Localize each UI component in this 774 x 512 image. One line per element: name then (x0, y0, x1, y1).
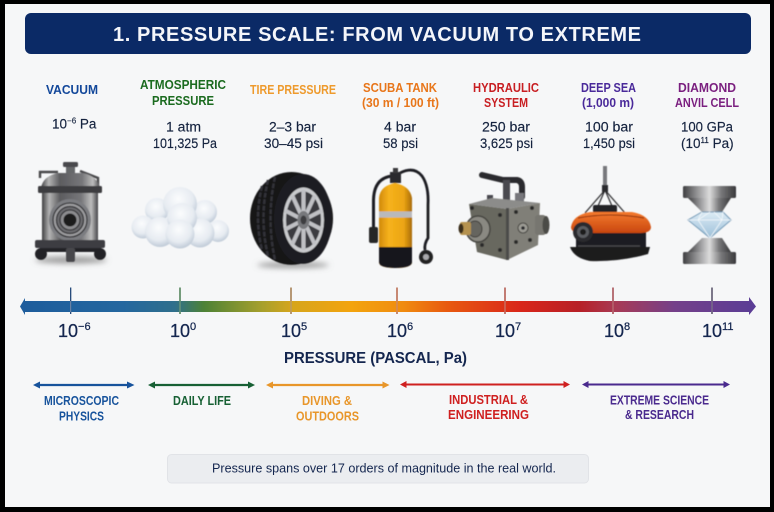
deep sea value: 1,450 psi (583, 136, 635, 151)
atmospheric value (153, 120, 217, 151)
title banner (25, 13, 751, 54)
scuba heading: SCUBA TANK (363, 81, 437, 95)
column: deep sea (570, 81, 651, 261)
scuba heading: (30 m / 100 ft) (362, 96, 439, 110)
deep sea value: 100 bar (585, 120, 634, 134)
tick labels: 10 (495, 321, 515, 341)
diamond value: 11 (701, 136, 709, 145)
scuba value: 4 bar (384, 120, 417, 134)
diamond value: Pa) (709, 136, 734, 151)
tick labels: 8 (624, 321, 630, 333)
icon: diamond anvil (683, 186, 736, 264)
vacuum value: Pa (76, 116, 97, 132)
deep sea heading (581, 81, 636, 110)
tick labels: −6 (78, 321, 91, 333)
icon: tire (250, 172, 333, 268)
icon: vacuum chamber (35, 162, 107, 264)
tick labels: 10 (170, 321, 190, 341)
icon: scuba tank (369, 168, 433, 268)
diamond value: (10 (681, 136, 701, 151)
range: industrial and engineering (400, 381, 570, 422)
range label: DIVING & (302, 394, 352, 408)
hydraulic value: 3,625 psi (480, 136, 533, 151)
tick labels: 10 (281, 321, 301, 341)
range: diving and outdoors (266, 382, 390, 424)
atmospheric heading (140, 78, 226, 108)
scuba value (383, 120, 418, 151)
range label: EXTREME SCIENCE (610, 394, 709, 408)
range label (44, 394, 119, 424)
deep sea value (583, 120, 635, 151)
icon: submersible (570, 166, 651, 261)
range label: OUTDOORS (296, 410, 359, 424)
tick labels: 0 (190, 321, 196, 333)
range: microscopic physics (33, 382, 134, 424)
gradient arrow (20, 297, 756, 315)
vacuum value: 10 (52, 116, 67, 132)
icon: hydraulic block (458, 175, 550, 260)
tick labels: 11 (722, 321, 733, 333)
tick labels: 10 (387, 321, 407, 341)
tick highlights (71, 301, 712, 312)
tire value (264, 120, 323, 151)
diamond heading: DIAMOND (678, 81, 736, 95)
tire value: 30–45 psi (264, 136, 323, 151)
tire value: 2–3 bar (269, 120, 317, 134)
column: vacuum (35, 83, 107, 264)
range: daily life (148, 382, 255, 408)
column: tire pressure (250, 83, 336, 268)
range label: MICROSCOPIC (44, 394, 119, 408)
diamond value (681, 120, 734, 151)
axis label: PRESSURE (PASCAL, Pa) (284, 350, 467, 367)
diamond heading: ANVIL CELL (675, 96, 739, 110)
tick labels: 10 (58, 321, 78, 341)
callout: Pressure spans over 17 orders of magnitude in the real world. (212, 460, 556, 476)
hydraulic value: 250 bar (482, 120, 531, 134)
tick labels: 6 (407, 321, 413, 333)
arrow: extreme science and research (582, 381, 730, 388)
range label: PHYSICS (59, 410, 104, 424)
range label: DAILY LIFE (173, 394, 231, 408)
tick labels: 10 (702, 321, 722, 341)
range label (610, 394, 709, 422)
scuba value: 58 psi (383, 136, 418, 151)
hydraulic heading (473, 81, 539, 110)
column: scuba tank (362, 81, 439, 268)
column: atmospheric pressure (132, 78, 229, 248)
scuba heading (362, 81, 439, 110)
range label: & RESEARCH (625, 408, 694, 422)
column: hydraulic system (458, 81, 550, 260)
hydraulic value (480, 120, 533, 151)
range label (296, 394, 359, 424)
range label (448, 393, 529, 422)
tick labels: 7 (515, 321, 521, 333)
arrow: microscopic physics (33, 382, 134, 388)
column: diamond anvil cell (675, 81, 739, 264)
icon: cloud (132, 187, 229, 248)
atmospheric value: 101,325 Pa (153, 136, 217, 151)
vacuum heading: VACUUM (46, 83, 98, 97)
pressure scale bar (20, 288, 756, 341)
arrow: diving and outdoors (266, 382, 390, 388)
diamond value: 100 GPa (681, 120, 733, 134)
atmospheric heading: PRESSURE (152, 94, 214, 108)
tick labels: 10 (604, 321, 624, 341)
title banner: 1. PRESSURE SCALE: FROM VACUUM TO EXTREME (113, 24, 641, 46)
callout (168, 454, 588, 483)
tick labels: 5 (301, 321, 307, 333)
arrow: industrial and engineering (400, 381, 570, 388)
diamond heading (675, 81, 739, 110)
vacuum value: −6 (67, 116, 77, 126)
hydraulic heading: HYDRAULIC (473, 81, 539, 95)
atmospheric value: 1 atm (166, 120, 201, 134)
hydraulic heading: SYSTEM (484, 96, 528, 110)
tick marks (71, 288, 712, 314)
deep sea heading: (1,000 m) (582, 96, 634, 110)
deep sea heading: DEEP SEA (581, 81, 636, 95)
arrow: daily life (148, 382, 255, 388)
range label: ENGINEERING (448, 408, 529, 422)
atmospheric heading: ATMOSPHERIC (140, 78, 226, 92)
range label: INDUSTRIAL & (449, 393, 528, 407)
tire heading: TIRE PRESSURE (250, 83, 336, 97)
tick labels (58, 321, 733, 341)
range: extreme science and research (582, 381, 730, 422)
